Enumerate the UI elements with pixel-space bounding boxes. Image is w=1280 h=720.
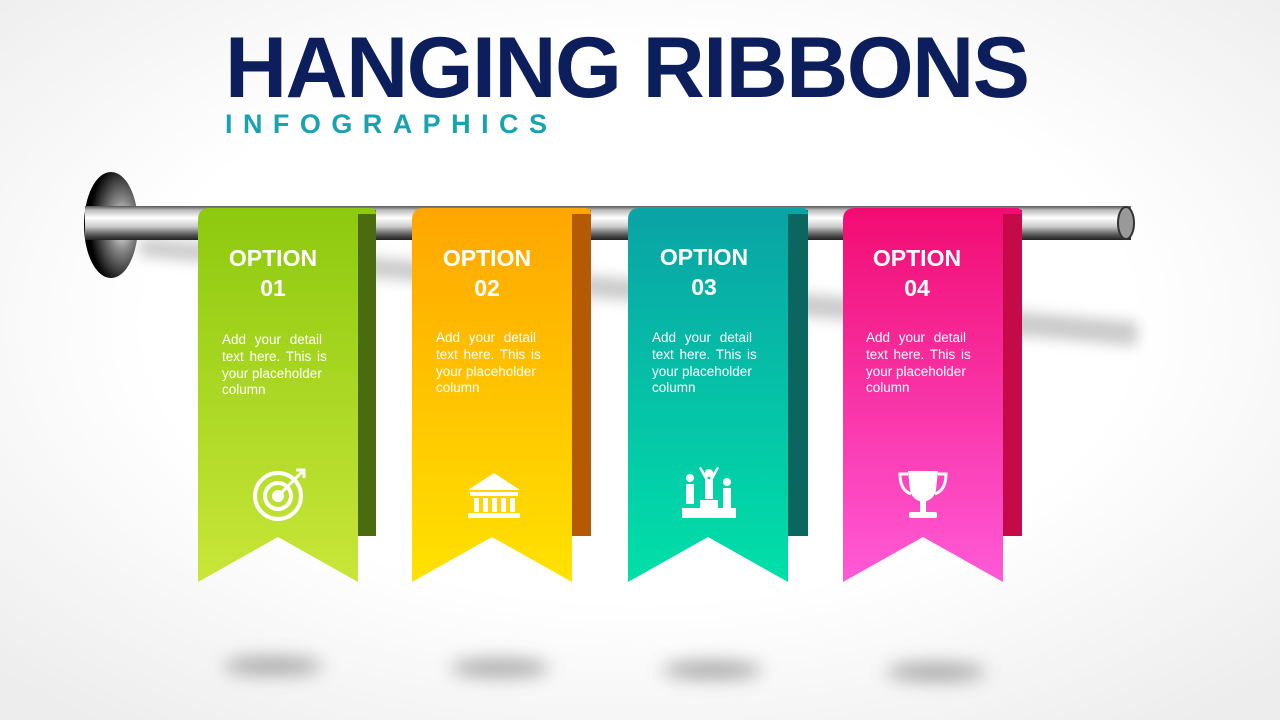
icon: podium (682, 467, 736, 518)
rod shadow (140, 238, 1137, 346)
ribbon 3: your placeholder (652, 364, 752, 379)
ribbon 3: column (652, 380, 696, 395)
ribbon 1: your placeholder (222, 366, 322, 381)
ribbon 1 (198, 208, 376, 582)
ribbon 1: Add your detail (222, 332, 322, 347)
ribbon 2: Add your detail (436, 330, 536, 345)
icon: trophy (900, 471, 946, 518)
ribbon 1: 01 (260, 275, 286, 301)
ribbon 3: OPTION (660, 244, 748, 270)
icon: bank (468, 473, 520, 518)
ribbon 1: column (222, 382, 266, 397)
floor shadows (223, 657, 986, 681)
title: HANGING RIBBONS (225, 20, 1030, 116)
ribbon 4: OPTION (873, 245, 961, 271)
ribbon 3: 03 (691, 274, 717, 300)
ribbon 4: 04 (904, 275, 930, 301)
ribbon 3: Add your detail (652, 330, 752, 345)
ribbon 2 (412, 208, 591, 582)
ribbon 4: Add your detail (866, 330, 966, 345)
ribbon 2: column (436, 380, 480, 395)
ribbon 3: text here. This is (652, 347, 757, 362)
ribbon 4: your placeholder (866, 364, 966, 379)
ribbon 4: text here. This is (866, 347, 971, 362)
icon: target (255, 470, 304, 519)
ribbon 3 (628, 208, 808, 582)
ribbon 4: column (866, 380, 910, 395)
ribbon 1: OPTION (229, 245, 317, 271)
subtitle: INFOGRAPHICS (225, 109, 547, 139)
ribbon 2: text here. This is (436, 347, 541, 362)
rod (84, 172, 1134, 278)
ribbon 2: your placeholder (436, 364, 536, 379)
ribbon 2: 02 (474, 275, 500, 301)
ribbon 4 (843, 208, 1022, 582)
ribbon 2: OPTION (443, 245, 531, 271)
ribbon 1: text here. This is (222, 349, 327, 364)
